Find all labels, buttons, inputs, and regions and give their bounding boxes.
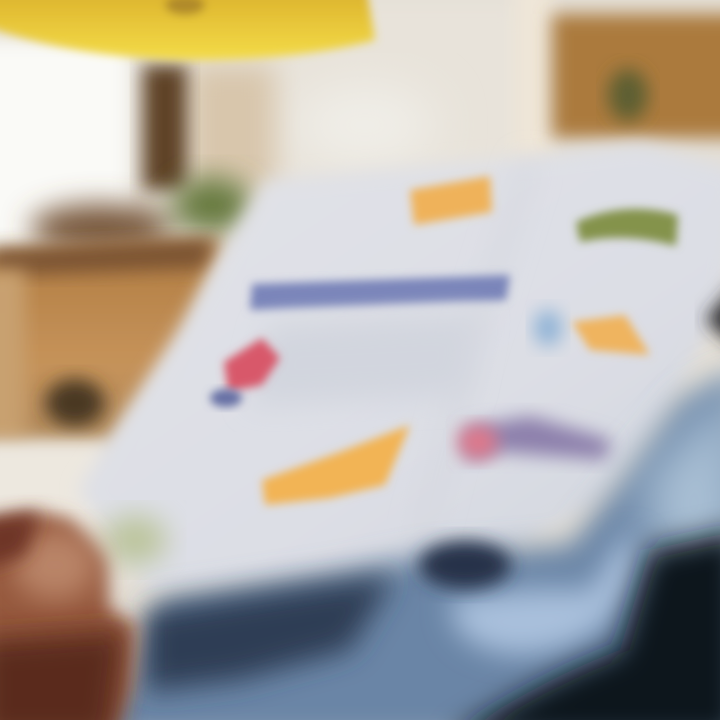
yellow lamp shade <box>0 0 375 60</box>
pink and blue stripe <box>465 416 612 460</box>
red icon <box>224 338 280 392</box>
blue and orange block <box>534 310 562 346</box>
faint text lines <box>250 315 480 405</box>
green mark lower left <box>103 515 167 565</box>
wooden cabinet <box>0 238 225 527</box>
leaflet fold <box>420 160 530 545</box>
hand <box>0 512 135 720</box>
leaflet <box>78 143 720 590</box>
window <box>0 40 130 245</box>
green block <box>576 209 678 246</box>
orange block top <box>410 176 492 225</box>
sleeve and jeans <box>90 280 720 720</box>
wooden frame upper right <box>515 0 720 160</box>
blue heading bar <box>250 275 510 310</box>
large orange block <box>262 425 410 505</box>
plant on cabinet <box>30 177 252 252</box>
leaflet sheet <box>78 143 720 590</box>
dark wooden post <box>143 65 187 190</box>
